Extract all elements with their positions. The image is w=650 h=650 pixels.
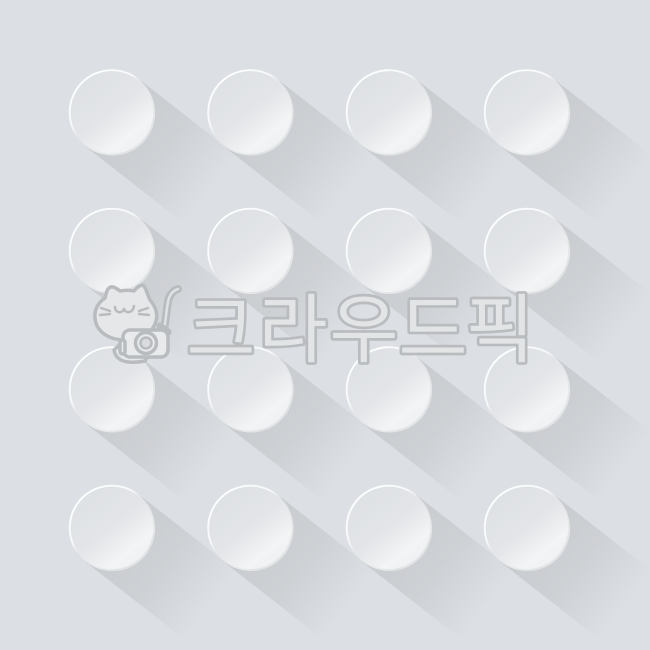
cat tail [163, 289, 178, 334]
wordmark: 드 [398, 288, 468, 372]
wordmark: 픽 [465, 288, 535, 372]
camera side grip [120, 340, 125, 354]
cat mouth [115, 306, 134, 312]
grid of raised discs [70, 70, 570, 571]
camera lens inner [140, 338, 152, 348]
camera strap [160, 326, 168, 332]
long shadows [86, 79, 650, 639]
wordmark: 우 [329, 288, 399, 372]
camera body [123, 330, 168, 357]
wordmark [186, 288, 535, 372]
watermark logo [95, 285, 535, 372]
cat body [114, 335, 150, 362]
wordmark: 라 [258, 288, 328, 372]
icon: cat with camera [95, 285, 178, 362]
camera lens [136, 332, 156, 354]
cat whiskers [100, 308, 149, 315]
wordmark: 크 [186, 288, 256, 372]
cat head [95, 285, 157, 340]
